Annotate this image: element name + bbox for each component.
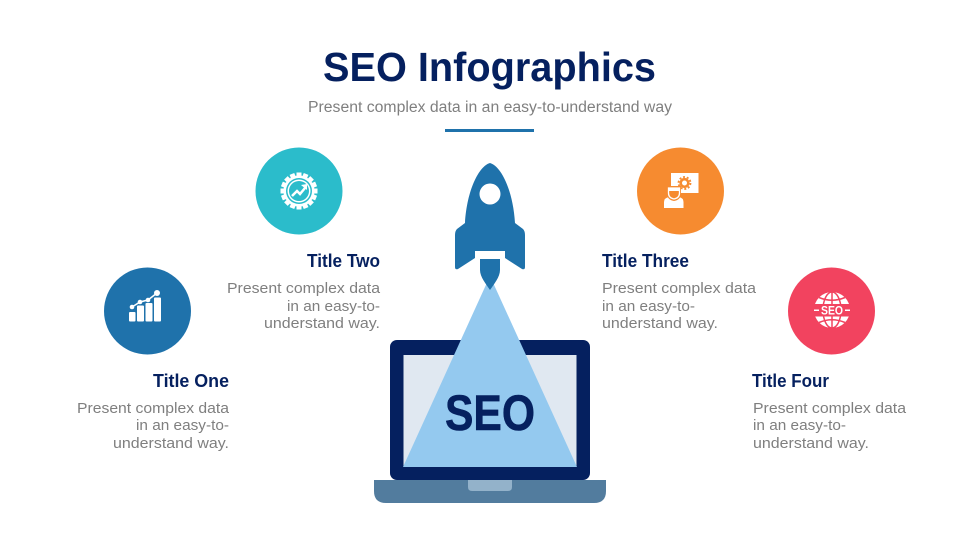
text: title three: Present complex data [602, 280, 757, 297]
circle: title one [104, 268, 191, 354]
icon: SEO globe: SEO [821, 304, 843, 318]
light beam [403, 276, 577, 467]
text: title four: understand way. [753, 435, 869, 452]
item: title two [227, 148, 381, 332]
item: title one [77, 268, 230, 452]
text: title three: in an easy-to- [602, 298, 695, 315]
laptop notch [468, 480, 512, 491]
icon: gear with growth arrow [280, 172, 318, 210]
heading: title four: Title Four [752, 371, 829, 391]
text: title four: Present complex data [753, 400, 907, 417]
item: title three [602, 148, 757, 332]
rocket flame [480, 259, 500, 290]
laptop screen [404, 355, 576, 467]
subtitle: Present complex data in an easy-to-understand way [308, 99, 672, 116]
laptop base [374, 480, 606, 503]
circle: title three [637, 148, 724, 234]
text: title three: understand way. [602, 315, 718, 332]
title underline [445, 129, 534, 132]
icon: bar chart [129, 290, 161, 322]
circle: title two [256, 148, 342, 234]
text: title one: Present complex data [77, 400, 230, 417]
text: title one [77, 400, 230, 452]
text: title four: in an easy-to- [753, 417, 846, 434]
icon: presenter with gear board [664, 173, 698, 208]
circle: title four [788, 268, 875, 354]
text: title two: understand way. [264, 315, 380, 332]
rocket body [455, 163, 525, 269]
icon: SEO globe [812, 292, 852, 328]
item: title four [752, 268, 907, 452]
heading: title two: Title Two [307, 251, 380, 271]
text: title two [227, 280, 381, 332]
heading: title three: Title Three [602, 251, 689, 271]
heading: title one: Title One [153, 371, 229, 391]
icon: rocket [455, 163, 525, 290]
text: title one: understand way. [113, 435, 229, 452]
laptop illustration [374, 276, 606, 503]
text: title four [753, 400, 907, 452]
text: title two: in an easy-to- [287, 298, 380, 315]
laptop label: SEO [445, 385, 535, 441]
text: title one: in an easy-to- [136, 417, 229, 434]
title: SEO Infographics [323, 44, 656, 90]
laptop frame [390, 340, 590, 480]
text: title three [602, 280, 757, 332]
text: title two: Present complex data [227, 280, 381, 297]
